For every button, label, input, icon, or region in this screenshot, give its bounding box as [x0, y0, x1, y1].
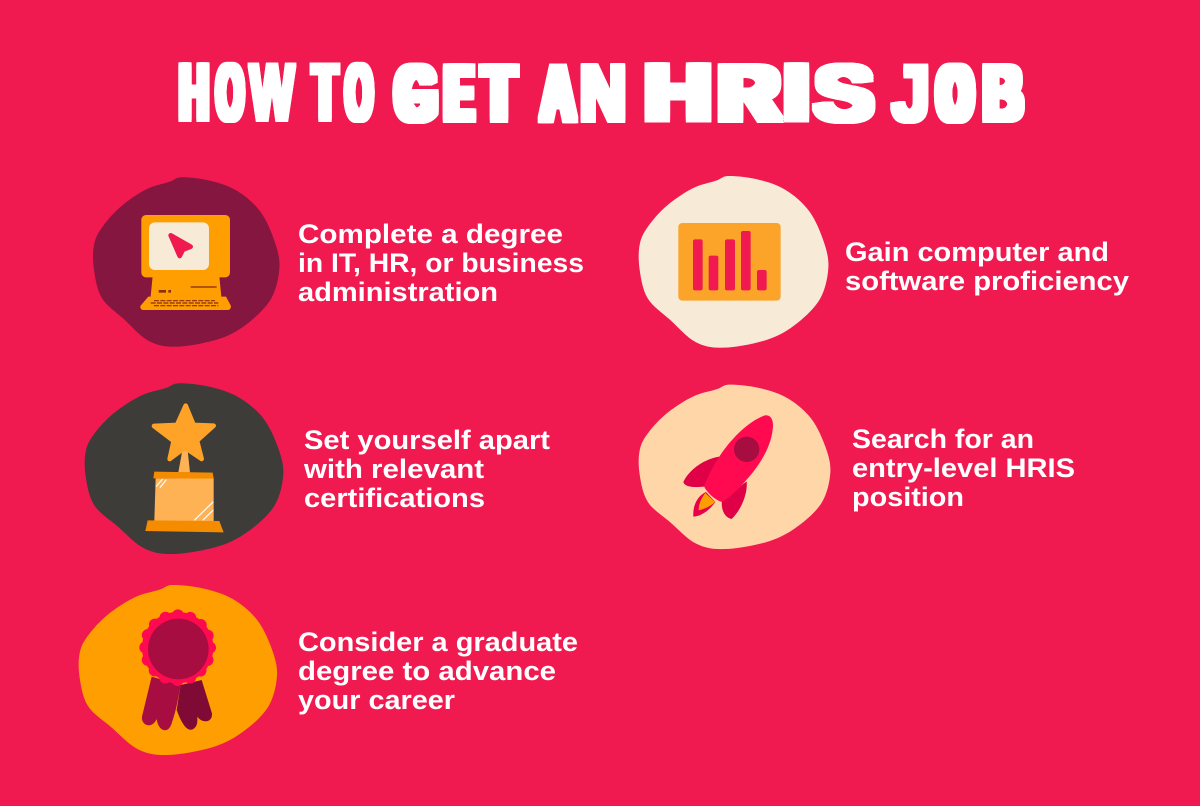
text: graduate degree: Consider a graduate: [298, 627, 578, 657]
step 1: complete a degree: [93, 177, 584, 347]
text: complete a degree: Complete a degree: [298, 219, 563, 249]
icon: ribbon rosette: [142, 612, 213, 730]
title: T: [313, 48, 337, 138]
title: S: [814, 49, 874, 137]
text: computer proficiency: Gain computer and: [845, 237, 1109, 267]
icon: rocket: [683, 415, 773, 519]
blob: peach: [639, 385, 830, 549]
icon: computer: [140, 215, 231, 310]
blob: dark maroon: [93, 177, 280, 347]
title: H: [644, 51, 712, 134]
title: E: [445, 49, 472, 137]
icon: trophy: [145, 406, 224, 532]
title: G: [395, 49, 436, 137]
step 2: certifications: [85, 383, 550, 554]
title: O: [345, 48, 372, 138]
text: graduate degree: degree to advance: [298, 656, 556, 686]
text: graduate degree: your career: [298, 685, 456, 715]
title: A: [541, 49, 574, 137]
text: complete a degree: administration: [298, 277, 498, 307]
text: certifications: with relevant: [303, 454, 484, 484]
step 5: entry-level position: [639, 385, 1075, 549]
title: W: [250, 48, 294, 138]
title: N: [580, 49, 626, 137]
text: entry-level position: position: [852, 482, 964, 512]
title: J: [892, 49, 930, 137]
blob: cream: [639, 176, 828, 348]
icon: bar chart: [678, 223, 781, 301]
title: [178, 48, 1025, 138]
title: O: [216, 48, 243, 138]
text: computer proficiency: software proficiency: [845, 266, 1129, 296]
text: certifications: certifications: [304, 483, 485, 513]
text: certifications: Set yourself apart: [304, 425, 550, 455]
title: R: [718, 49, 779, 137]
blob: orange: [79, 585, 277, 755]
title: H: [179, 48, 208, 138]
text: complete a degree: in IT, HR, or business: [298, 248, 584, 278]
blob: charcoal: [85, 383, 283, 554]
text: entry-level position: Search for an: [852, 424, 1034, 454]
step 4: computer proficiency: [639, 176, 1129, 348]
title: I: [786, 51, 807, 134]
text: entry-level position: entry-level HRIS: [852, 453, 1075, 483]
step 3: graduate degree: [79, 585, 578, 755]
title: T: [482, 49, 515, 137]
title: O: [938, 49, 972, 137]
title: B: [983, 49, 1022, 137]
